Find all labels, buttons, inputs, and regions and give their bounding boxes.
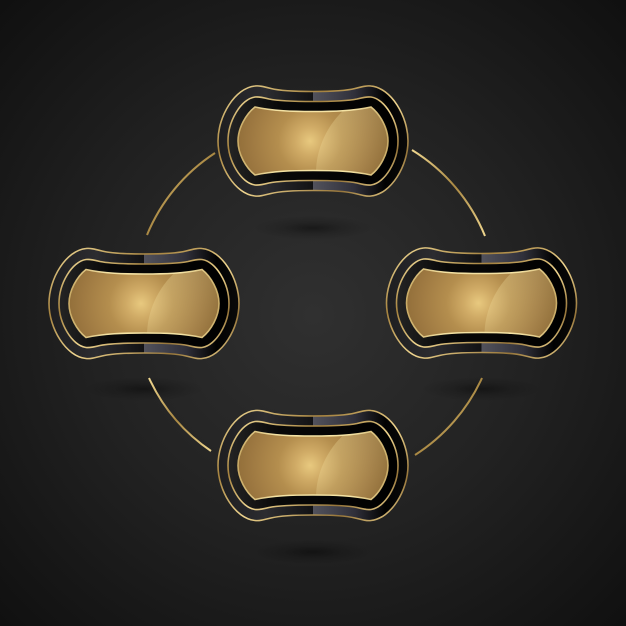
- arc: top-left connector: [147, 153, 215, 235]
- gold plate: [69, 270, 219, 338]
- plate highlight: [316, 432, 387, 497]
- outer band: [386, 248, 576, 358]
- outer band: [49, 248, 239, 359]
- plate highlight: [484, 270, 556, 334]
- shadow: right badge: [421, 377, 541, 401]
- arc: bottom-left connector: [149, 378, 211, 451]
- inner ring: [396, 259, 566, 347]
- inner ring: [59, 259, 229, 348]
- badge: right: [386, 248, 576, 358]
- arc: top-right connector: [412, 150, 485, 236]
- shadow: bottom badge: [253, 540, 373, 564]
- plate highlight: [147, 270, 218, 335]
- shadow: left badge: [84, 377, 204, 401]
- badge: top: [218, 86, 408, 196]
- gold plate: [238, 107, 388, 175]
- badge: left: [49, 248, 239, 359]
- plate highlight: [316, 108, 387, 172]
- inner ring: [228, 97, 398, 185]
- inner ring: [228, 421, 398, 510]
- outer band: [218, 410, 408, 521]
- arc: bottom-right connector: [415, 378, 482, 455]
- badge: bottom: [218, 410, 408, 521]
- shadow: top badge: [253, 216, 373, 240]
- gold plate: [238, 432, 388, 500]
- outer band: [218, 86, 408, 196]
- gold plate: [406, 269, 556, 337]
